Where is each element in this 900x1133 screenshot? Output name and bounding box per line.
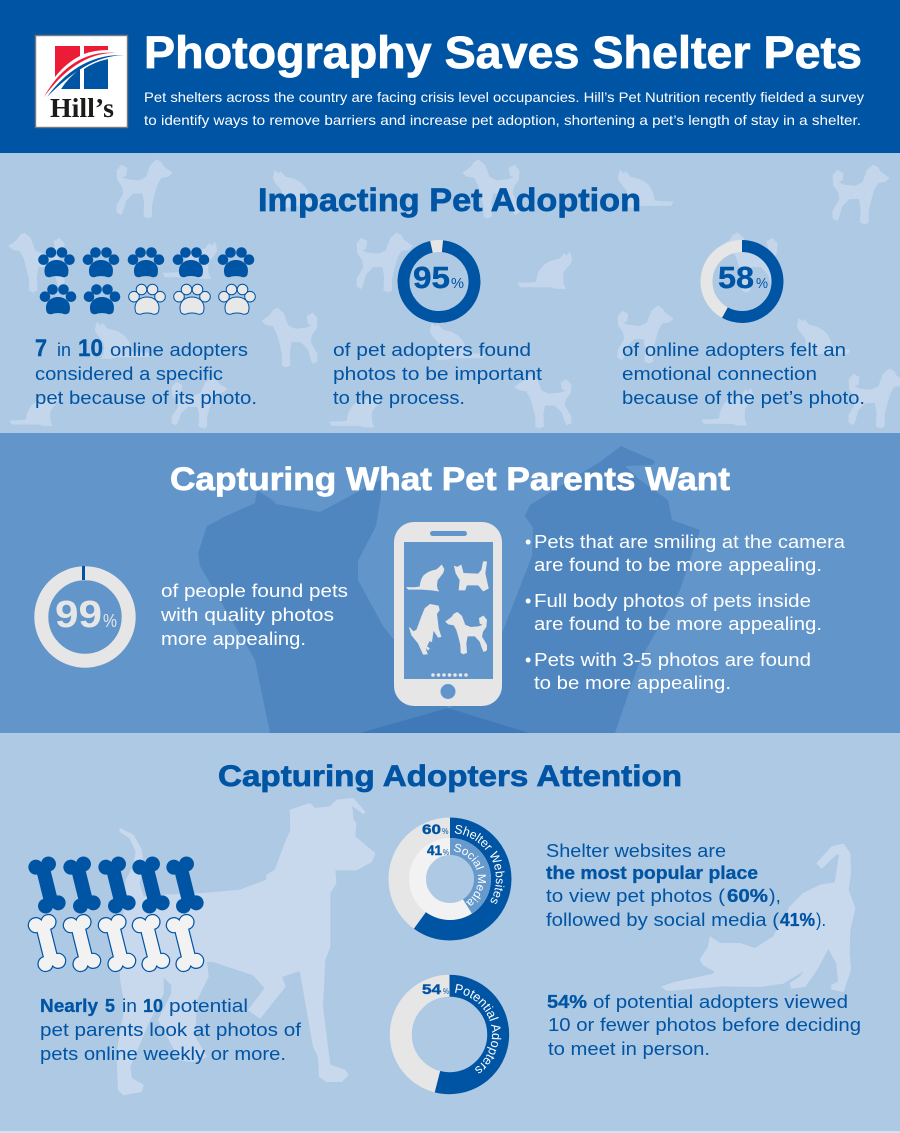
panel: impacting pet adoption bbox=[0, 153, 900, 433]
silhouette: stretching cat bbox=[662, 844, 855, 992]
text: 7 in 10: considered a specific bbox=[35, 364, 223, 384]
donut: potential adopters: 54 bbox=[422, 981, 441, 997]
text: shelter websites: ), bbox=[769, 886, 781, 906]
text: bullet list: • bbox=[525, 532, 531, 552]
text: nearly 5 in 10: Nearly bbox=[40, 996, 98, 1016]
donut: 95 percent bbox=[400, 243, 478, 320]
text: nearly 5 in 10: potential bbox=[169, 996, 248, 1016]
donut: potential adopters: % bbox=[443, 987, 449, 996]
text: 7 in 10: pet because of its photo. bbox=[35, 388, 257, 408]
text: bullet list: are found to be more appealing. bbox=[534, 555, 822, 575]
text: 7 in 10: online adopters bbox=[110, 340, 248, 360]
text: shelter websites bbox=[546, 841, 826, 930]
text: 54 percent bbox=[547, 992, 861, 1059]
donut: shelter websites and social media bbox=[388, 818, 512, 940]
text: nearly 5 in 10: pets online weekly or more. bbox=[40, 1044, 286, 1064]
text: 7 in 10: 7 bbox=[35, 335, 47, 362]
silhouette: large dog bbox=[117, 798, 375, 1095]
intro text bbox=[144, 89, 864, 128]
text: 54 percent: to meet in person. bbox=[548, 1039, 710, 1059]
donut: shelter websites and social media: % bbox=[442, 827, 448, 836]
text: 7 in 10 bbox=[35, 335, 257, 408]
donut: 95 percent: 95 bbox=[413, 260, 450, 295]
donut: 99 percent: 99 bbox=[55, 594, 102, 636]
text: 7 in 10: in bbox=[57, 340, 71, 360]
text: bullet list: are found to be more appealing. bbox=[534, 614, 822, 634]
text: shelter websites: followed by social media ( bbox=[546, 910, 779, 930]
text: bullet list: Pets with 3-5 photos are found bbox=[534, 650, 811, 670]
donut: 58 percent: % bbox=[756, 275, 768, 292]
text: nearly 5 in 10 bbox=[40, 996, 302, 1064]
text: nearly 5 in 10: pet parents look at photos of bbox=[40, 1020, 302, 1040]
text: 58 percent: emotional connection bbox=[622, 364, 817, 384]
donut: potential adopters: Potential Adopters bbox=[455, 984, 502, 1074]
text: 95 percent: photos to be important bbox=[333, 364, 542, 384]
text: 7 in 10: 10 bbox=[78, 335, 103, 362]
text: shelter websites: 60% bbox=[727, 886, 768, 906]
heading: capturing adopters attention: Capturing Adopters Attention bbox=[218, 760, 682, 793]
text: shelter websites: the most popular place bbox=[546, 863, 758, 883]
text: nearly 5 in 10: 10 bbox=[143, 996, 163, 1016]
text: 54 percent: 54% bbox=[547, 992, 587, 1012]
background cat and dog silhouette bbox=[198, 446, 700, 733]
heading: capturing what pet parents want: Capturing What Pet Parents Want bbox=[170, 461, 730, 497]
donut: potential adopters bbox=[390, 974, 510, 1094]
text: bullet list: • bbox=[525, 650, 531, 670]
background pet silhouettes bbox=[9, 160, 900, 428]
panel: capturing adopters attention bbox=[0, 760, 900, 1133]
donut: shelter websites and social media: 60 bbox=[422, 821, 441, 837]
donut: shelter websites and social media: 41 bbox=[427, 842, 442, 858]
text: 58 percent bbox=[622, 340, 865, 408]
text: bullet list bbox=[525, 532, 846, 693]
text: shelter websites: Shelter websites are bbox=[546, 841, 726, 861]
logo: Hill's: Hill’s bbox=[50, 93, 114, 123]
intro text: Pet shelters across the country are facing crisis level occupancies. Hill’s Pet Nutrition recently fielded a survey bbox=[144, 89, 864, 105]
donut: shelter websites and social media: Social Media bbox=[454, 844, 486, 906]
text: bullet list: to be more appealing. bbox=[534, 673, 731, 693]
text: 54 percent: of potential adopters viewed bbox=[593, 992, 848, 1012]
text: bullet list: • bbox=[525, 591, 531, 611]
text: 95 percent: of pet adopters found bbox=[333, 340, 531, 360]
text: 99 percent: of people found pets bbox=[161, 581, 348, 601]
text: 99 percent bbox=[160, 581, 348, 649]
panel: capturing what pet parents want bbox=[0, 433, 900, 733]
donut: 99 percent: % bbox=[103, 611, 117, 631]
text: bullet list: Full body photos of pets inside bbox=[534, 591, 811, 611]
donut: 58 percent: 58 bbox=[718, 260, 754, 295]
donut: shelter websites and social media: % bbox=[443, 848, 449, 857]
title: Photography Saves Shelter Pets bbox=[144, 27, 862, 78]
text: 95 percent: to the process. bbox=[333, 388, 465, 408]
donut: shelter websites and social media: Shelter Websites bbox=[454, 825, 505, 904]
text: 99 percent: more appealing. bbox=[161, 629, 306, 649]
donut: 58 percent bbox=[706, 246, 778, 317]
text: nearly 5 in 10: in bbox=[122, 996, 137, 1016]
icon group: 5 of 10 bones bbox=[27, 855, 205, 973]
logo: Hill's bbox=[36, 36, 128, 128]
text: nearly 5 in 10: 5 bbox=[105, 996, 115, 1016]
text: 95 percent bbox=[333, 340, 542, 408]
intro text: to identify ways to remove barriers and increase pet adoption, shortening a pet’s length of stay in a shelter. bbox=[144, 112, 861, 128]
text: 54 percent: 10 or fewer photos before deciding bbox=[548, 1015, 861, 1035]
text: 99 percent: with quality photos bbox=[160, 605, 334, 625]
text: bullet list: Pets that are smiling at the camera bbox=[534, 532, 846, 552]
heading: impacting pet adoption: Impacting Pet Adoption bbox=[258, 182, 641, 218]
donut: 95 percent: % bbox=[451, 275, 464, 292]
text: shelter websites: 41% bbox=[780, 910, 815, 930]
icon: phone with pets bbox=[394, 522, 502, 706]
text: 58 percent: because of the pet’s photo. bbox=[622, 388, 865, 408]
icon group: 7 of 10 paws bbox=[38, 247, 255, 314]
panel: header bbox=[0, 0, 900, 153]
text: shelter websites: to view pet photos ( bbox=[546, 886, 725, 906]
donut: 99 percent bbox=[41, 566, 129, 661]
text: 58 percent: of online adopters felt an bbox=[622, 340, 846, 360]
text: shelter websites: ). bbox=[816, 910, 826, 930]
